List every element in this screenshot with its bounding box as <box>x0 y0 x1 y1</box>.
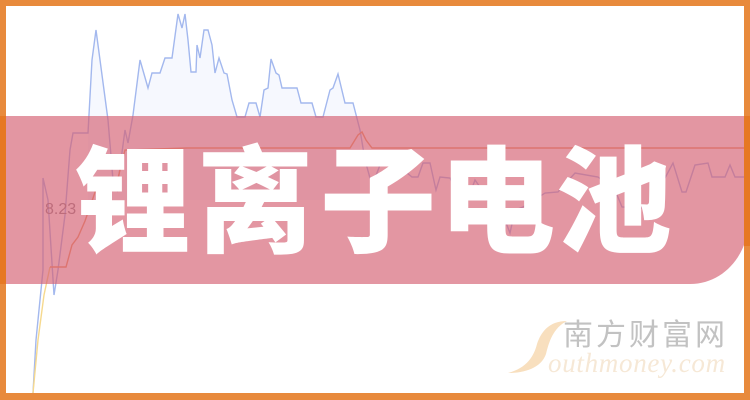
brand name: 南方财富网 <box>563 319 728 352</box>
brand url: outhmoney.com <box>548 348 726 378</box>
title: 锂 <box>75 138 191 268</box>
title: 离 <box>197 138 313 268</box>
title: 池 <box>556 138 672 268</box>
axis label: 8.23 <box>45 201 76 218</box>
watermark: southmoney logo <box>508 319 728 378</box>
title: 子 <box>320 138 436 268</box>
icon: swoosh S <box>508 321 567 373</box>
title: 电 <box>439 138 555 268</box>
